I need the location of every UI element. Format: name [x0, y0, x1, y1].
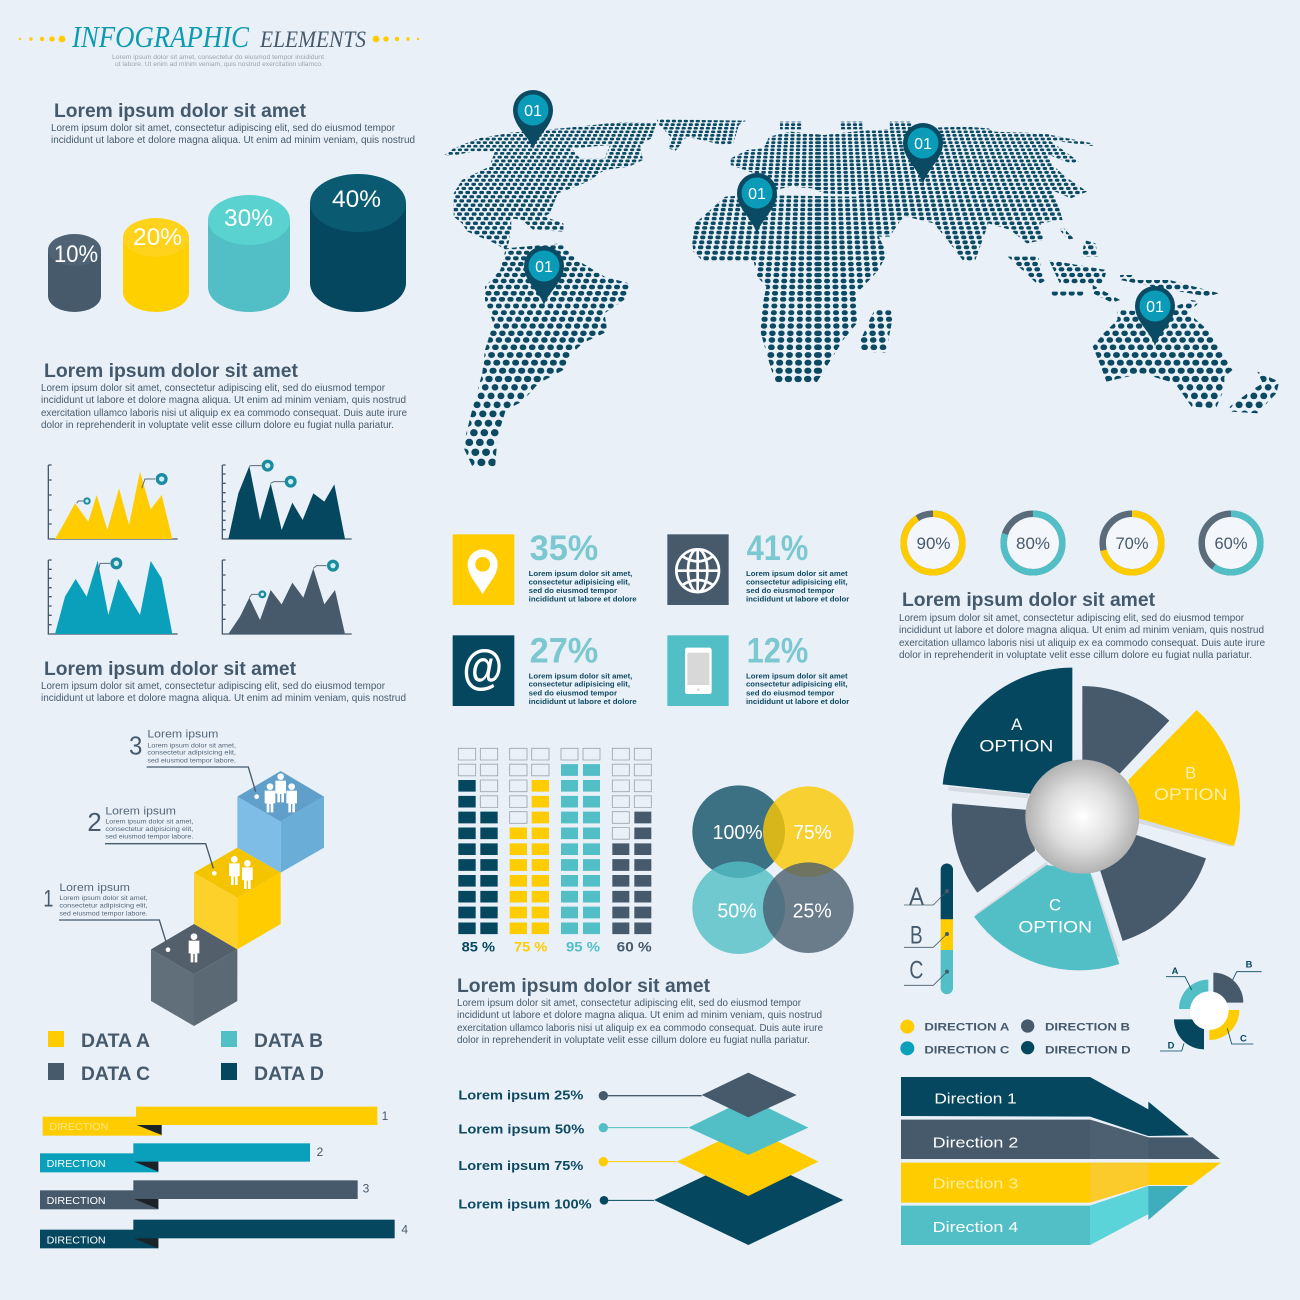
text block: below area charts	[41, 659, 406, 704]
column chart 75%	[518, 780, 540, 934]
map pin: North America	[513, 90, 553, 149]
area chart: yellow	[48, 465, 178, 539]
direction bar 3	[40, 1180, 370, 1209]
map pin: Africa: 01	[748, 186, 766, 203]
step label 2	[87, 805, 194, 841]
ABC vertical bar	[904, 863, 953, 994]
segment slate left	[952, 803, 1035, 893]
segment A option: A	[1011, 715, 1023, 734]
map pin: North America: 01	[524, 103, 542, 120]
segment A option: OPTION	[979, 737, 1053, 756]
venn diagram: 75%	[793, 822, 832, 844]
stat: 41% globe: 41%	[747, 529, 808, 568]
text block: cylinders intro	[51, 101, 415, 146]
cube 1: grey	[151, 924, 237, 1026]
text block: donuts: exercitation ullamco laboris nisi ut aliquip ex ea commodo consequat. Duis aute irure	[899, 637, 1265, 649]
data legend: DATA B	[254, 1031, 323, 1052]
direction bar 4: 4	[401, 1223, 408, 1237]
segment B option	[1128, 710, 1240, 846]
layer connectors	[599, 1091, 702, 1205]
arrow band 3	[901, 1163, 1221, 1203]
text block: area charts intro: Lorem ipsum dolor sit amet, consectetur adipiscing elit, sed do eiusmod tempor	[41, 382, 385, 394]
text block: center lower: incididunt ut labore et dolore magna aliqua. Ut enim ad minim veniam, quis nostrud	[457, 1009, 822, 1021]
donut 90%: 90%	[916, 534, 950, 553]
segment slate upper	[1082, 686, 1169, 773]
text block: donuts: Lorem ipsum dolor sit amet	[902, 590, 1156, 611]
map pin: Asia: 01	[914, 136, 932, 153]
stat: 27% email: @	[462, 641, 503, 695]
direction bar 4: DIRECTION	[47, 1235, 106, 1246]
title	[19, 19, 419, 68]
direction legend: DIRECTION A	[924, 1022, 1009, 1034]
segment C option: OPTION	[1018, 917, 1092, 936]
text block: cylinders intro: Lorem ipsum dolor sit amet	[54, 101, 307, 122]
mini segmented donut: B	[1246, 959, 1253, 969]
layer labels: Lorem ipsum 50%	[458, 1122, 584, 1136]
step label 3	[129, 729, 236, 764]
icon statistics panel	[453, 529, 849, 706]
map pin: Australia: 01	[1146, 299, 1164, 316]
layer labels: Lorem ipsum 25%	[458, 1088, 583, 1102]
mini segmented donut: C	[1240, 1034, 1247, 1044]
right column graphics	[900, 668, 1262, 1056]
cylinder 30%	[208, 195, 290, 312]
text block: area charts intro: Lorem ipsum dolor sit amet	[44, 361, 299, 382]
donut 70%	[1103, 514, 1161, 572]
cylinder chart	[48, 174, 406, 312]
step label 3: sed eiusmod tempor labore.	[147, 757, 236, 764]
decorative title dots right	[373, 36, 419, 42]
stat: 35% location	[453, 529, 637, 605]
column labels: 85 %	[462, 939, 496, 955]
merging direction arrows	[901, 1077, 1221, 1245]
cylinder 10%	[48, 234, 101, 312]
segment B option: B	[1185, 763, 1196, 782]
direction bar 3: 3	[363, 1181, 370, 1195]
direction bar 1: 1	[382, 1109, 389, 1123]
stat: 41% globe: sed do eiusmod tempor	[746, 586, 834, 595]
area chart: slate	[222, 560, 352, 634]
people icons	[166, 773, 297, 962]
empty cells	[458, 748, 651, 839]
text block: area charts intro	[41, 361, 407, 431]
direction legend: DIRECTION C	[924, 1044, 1009, 1056]
stat: 35% location: sed do eiusmod tempor	[529, 586, 617, 595]
layered diamonds chart	[458, 1073, 843, 1245]
stat: 41% globe	[667, 529, 849, 605]
donut 90%	[904, 514, 962, 572]
direction bars	[40, 1107, 408, 1248]
stat: 41% globe: consectetur adipisicing elit,	[746, 577, 848, 586]
text block: center lower: dolor in reprehenderit in voluptate velit esse cillum dolore eu fugiat nulla pariatur.	[457, 1034, 810, 1046]
map pin: South America	[524, 246, 564, 305]
direction bar 1: DIRECTION	[49, 1122, 108, 1133]
layer labels: Lorem ipsum 75%	[458, 1159, 583, 1173]
direction legend: DIRECTION D	[1045, 1044, 1131, 1056]
area chart: navy	[222, 460, 352, 539]
step label 2: sed eiusmod tempor labore.	[105, 834, 194, 841]
stat: 12% phone: Lorem ipsum dolor sit amet	[746, 671, 848, 680]
exploded pie chart	[943, 668, 1240, 970]
data legend: DATA C	[81, 1064, 150, 1085]
venn diagram	[692, 785, 854, 954]
map dots	[445, 121, 1290, 462]
arrow band 2: Direction 2	[933, 1135, 1018, 1151]
text block: area charts intro: dolor in reprehenderit in voluptate velit esse cillum dolore eu fugiat nulla pariatur.	[41, 419, 394, 431]
arrow band 3: Direction 3	[933, 1177, 1018, 1193]
segment C option: C	[1049, 896, 1061, 915]
progress column charts	[458, 748, 854, 955]
edge shadows	[948, 787, 1234, 957]
title subtext: ut labore. Ut enim ad minim veniam, quis nostrud exercitation ullamco.	[115, 62, 323, 68]
column chart 95%	[569, 764, 591, 934]
stat: 41% globe: incididunt ut labore et dolor	[746, 595, 849, 604]
stat: 12% phone: sed do eiusmod tempor	[746, 688, 834, 697]
cylinder 40%	[310, 174, 406, 312]
stat: 27% email: 27%	[530, 631, 598, 670]
step label 2: Lorem ipsum	[105, 805, 176, 817]
center sphere	[1025, 760, 1139, 874]
stat: 27% email: consectetur adipisicing elit,	[529, 680, 630, 689]
direction bar 1	[43, 1107, 389, 1136]
data legend	[48, 1031, 324, 1085]
column chart 60%	[621, 812, 643, 934]
donut percent row	[904, 514, 1260, 572]
step label 2: 2	[87, 807, 102, 837]
data legend: DATA A	[81, 1031, 150, 1052]
cylinder 20%	[123, 218, 189, 312]
text block: center lower: Lorem ipsum dolor sit amet	[457, 976, 711, 997]
step label 1: Lorem ipsum dolor sit amet,	[59, 895, 148, 902]
column labels: 60 %	[617, 939, 652, 955]
ABC vertical bar: C	[909, 956, 923, 984]
cylinder 30%: 30%	[224, 205, 273, 232]
diamond layers	[654, 1073, 843, 1245]
stat: 27% email	[453, 631, 637, 706]
stat: 12% phone: 12%	[747, 631, 808, 670]
step label 1: sed eiusmod tempor labore.	[59, 910, 148, 917]
stat: 12% phone	[667, 631, 849, 706]
step label 1: 1	[43, 886, 53, 913]
direction bar 4	[40, 1220, 408, 1248]
map pin: Africa	[737, 173, 777, 234]
direction bar 3: DIRECTION	[47, 1196, 106, 1207]
stat: 35% location: 35%	[530, 529, 598, 568]
dotted world map	[445, 90, 1290, 462]
arrow band 2	[901, 1120, 1220, 1159]
direction legend	[900, 1019, 1131, 1056]
donut 60%	[1202, 514, 1260, 572]
step leader lines	[59, 767, 256, 942]
stat: 41% globe: Lorem ipsum dolor sit amet	[746, 569, 848, 578]
mini segmented donut: D	[1168, 1041, 1175, 1051]
ABC vertical bar: A	[909, 883, 924, 911]
title subtext: Lorem ipsum dolor sit amet, consectetur do eiusmod tempor incididunt	[112, 55, 324, 61]
step label 2: consectetur adipisicing elit,	[105, 826, 194, 833]
step label 3: 3	[129, 731, 142, 761]
cylinder 40%: 40%	[332, 186, 381, 213]
arrow band 4	[901, 1186, 1188, 1245]
segment A option	[943, 668, 1072, 794]
isometric cube steps	[43, 729, 324, 1026]
stat: 35% location: Lorem ipsum dolor sit amet,	[529, 569, 632, 578]
venn diagram: 100%	[713, 822, 763, 844]
step label 3: Lorem ipsum dolor sit amet,	[147, 742, 236, 749]
segment B option: OPTION	[1154, 785, 1227, 804]
donut 70%: 70%	[1116, 534, 1148, 553]
title word: elements: ELEMENTS	[259, 27, 366, 52]
column labels	[462, 939, 652, 955]
text block: donuts: Lorem ipsum dolor sit amet, consectetur adipiscing elit, sed do eiusmod tempor	[899, 612, 1244, 624]
stat: 12% phone: consectetur adipisicing elit,	[746, 680, 848, 689]
text block: below area charts: incididunt ut labore et dolore magna aliqua. Ut enim ad minim veniam, quis nostrud	[41, 692, 406, 704]
arrow band 1: Direction 1	[934, 1091, 1017, 1107]
text block: center lower: Lorem ipsum dolor sit amet, consectetur adipiscing elit, sed do eiusmod tempor	[457, 997, 801, 1009]
donut 80%: 80%	[1016, 534, 1050, 553]
text block: cylinders intro: Lorem ipsum dolor sit amet, consectetur adipiscing elit, sed do eiusmod tempor	[51, 122, 395, 134]
cylinder 10%: 10%	[54, 241, 98, 268]
step label 1	[43, 882, 148, 917]
ABC vertical bar: B	[910, 921, 923, 949]
data legend: DATA D	[254, 1064, 324, 1085]
text block: donuts: dolor in reprehenderit in voluptate velit esse cillum dolore eu fugiat nulla pariatur.	[899, 649, 1252, 661]
direction bar 2	[40, 1143, 324, 1172]
text block: cylinders intro: incididunt ut labore et dolore magna aliqua. Ut enim ad minim veniam, quis nostrud	[51, 134, 415, 146]
column labels: 75 %	[514, 939, 548, 955]
direction legend: DIRECTION B	[1045, 1022, 1130, 1034]
text block: area charts intro: exercitation ullamco laboris nisi ut aliquip ex ea commodo consequat. Duis aute irure	[41, 407, 407, 419]
decorative title dots left	[19, 36, 65, 42]
step label 3: Lorem ipsum	[147, 729, 218, 741]
donut 80%	[1004, 514, 1062, 572]
cylinder 20%: 20%	[133, 224, 182, 251]
segment C option	[974, 865, 1119, 970]
area charts	[48, 460, 352, 634]
stat: 35% location: incididunt ut labore et dolore	[529, 595, 637, 604]
text block: center lower	[457, 976, 823, 1046]
mini segmented donut: A	[1172, 966, 1179, 976]
text block: donuts: incididunt ut labore et dolore magna aliqua. Ut enim ad minim veniam, quis nostrud	[899, 624, 1264, 636]
stat: 27% email: incididunt ut labore et dolore	[529, 697, 637, 706]
stat: 27% email: Lorem ipsum dolor sit amet,	[529, 671, 632, 680]
stat: 35% location: consectetur adipisicing elit,	[529, 577, 630, 586]
layer labels: Lorem ipsum 100%	[458, 1197, 592, 1211]
arrow band 4: Direction 4	[933, 1220, 1018, 1236]
map pin: Australia	[1135, 286, 1175, 346]
step label 3: consectetur adipisicing elit,	[147, 750, 236, 757]
area chart: cyan	[48, 557, 178, 634]
step label 1: consectetur adipisicing elit,	[59, 903, 148, 910]
arrow band 1	[901, 1077, 1189, 1136]
segment slate lower right	[1100, 835, 1206, 941]
stat: 12% phone: incididunt ut labore et dolor	[746, 697, 849, 706]
venn diagram: 50%	[717, 900, 757, 922]
column chart 85%	[467, 780, 489, 934]
title word: infographic: INFOGRAPHIC	[71, 19, 249, 54]
step label 1: Lorem ipsum	[59, 882, 130, 894]
stat: 27% email: sed do eiusmod tempor	[529, 688, 617, 697]
text block: center lower: exercitation ullamco laboris nisi ut aliquip ex ea commodo consequat. Duis aute irure	[457, 1022, 823, 1034]
direction bar 2: 2	[317, 1145, 324, 1159]
venn diagram: 25%	[793, 900, 832, 922]
title subtext	[112, 55, 324, 68]
map pin: Asia	[903, 123, 943, 184]
step label 2: Lorem ipsum dolor sit amet,	[105, 818, 194, 825]
map pin: South America: 01	[535, 259, 553, 276]
mini segmented donut	[1160, 959, 1262, 1051]
text block: below area charts: Lorem ipsum dolor sit amet, consectetur adipiscing elit, sed do eiusmod tempor	[41, 680, 385, 692]
layer labels	[458, 1088, 592, 1211]
direction bar 2: DIRECTION	[47, 1159, 106, 1170]
cube 2: yellow	[194, 848, 281, 949]
cube 3: blue	[237, 771, 324, 873]
text block: donuts	[899, 590, 1265, 661]
text block: below area charts: Lorem ipsum dolor sit amet	[44, 659, 297, 680]
donut 60%: 60%	[1214, 534, 1248, 553]
column labels: 95 %	[566, 939, 601, 955]
text block: area charts intro: incididunt ut labore et dolore magna aliqua. Ut enim ad minim veniam, quis nostrud	[41, 394, 406, 406]
